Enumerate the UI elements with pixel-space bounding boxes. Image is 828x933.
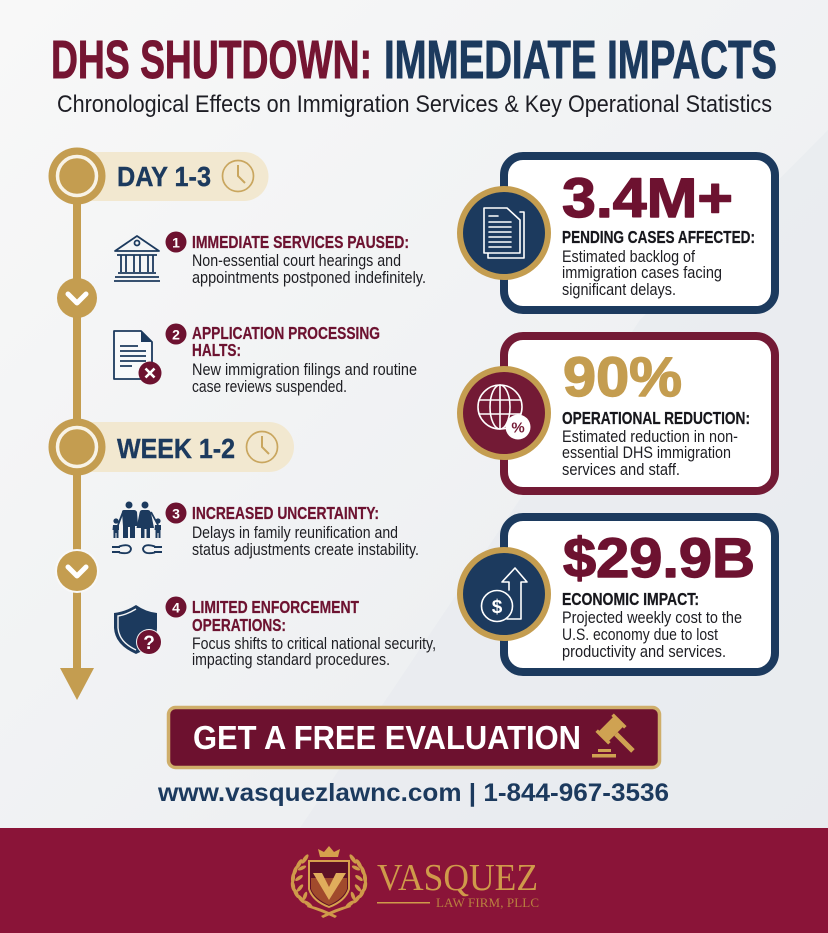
number badge	[166, 324, 186, 344]
stage: day 1-3	[48, 148, 268, 204]
statistic: $29.9B	[563, 526, 755, 589]
item 4	[114, 596, 436, 669]
heading: LIMITED ENFORCEMENT	[192, 597, 359, 617]
logo subtitle: LAW FIRM, PLLC	[436, 895, 539, 910]
description: Estimated reduction in non-	[562, 428, 738, 446]
description: services and staff.	[562, 461, 680, 479]
number badge: 4	[172, 600, 180, 616]
button background	[168, 708, 660, 768]
stage marker	[48, 418, 106, 476]
title: DHS SHUTDOWN:	[51, 30, 372, 90]
stage label: WEEK 1-2	[117, 433, 235, 464]
description: U.S. economy due to lost	[562, 626, 718, 644]
item 1	[114, 232, 426, 287]
item 2	[114, 323, 417, 396]
description: case reviews suspended.	[192, 378, 347, 396]
wreath	[290, 853, 368, 918]
description: Estimated backlog of	[562, 248, 695, 266]
description	[562, 428, 738, 479]
band	[0, 828, 828, 933]
number badge: 3	[172, 506, 180, 522]
description: Delays in family reunification and	[192, 524, 398, 542]
description: immigration cases facing	[562, 264, 722, 282]
timeline line	[73, 176, 81, 672]
number badge: 1	[172, 234, 180, 250]
timeline	[48, 148, 294, 700]
icon: dollar with rising arrow: $	[492, 597, 503, 618]
description	[562, 609, 742, 661]
stat card: operational reduction	[457, 336, 775, 491]
call to action button	[168, 708, 660, 768]
heading: HALTS:	[192, 340, 241, 360]
heading	[192, 323, 380, 360]
number badge	[166, 502, 186, 524]
heading: ECONOMIC IMPACT:	[562, 589, 699, 609]
icon: clock	[246, 432, 278, 462]
statistic: 3.4M+	[562, 166, 733, 229]
description	[192, 524, 419, 559]
heading: PENDING CASES AFFECTED:	[562, 227, 755, 247]
statistic: 90%	[563, 345, 682, 408]
description	[562, 248, 722, 299]
subtitle: Chronological Effects on Immigration Services & Key Operational Statistics	[57, 91, 772, 118]
description: Projected weekly cost to the	[562, 609, 742, 627]
title	[51, 30, 777, 90]
icon: courthouse	[114, 236, 160, 281]
stage marker	[48, 148, 106, 204]
heading: IMMEDIATE SERVICES PAUSED:	[192, 232, 409, 252]
icon: gavel	[592, 713, 642, 760]
description: status adjustments create instability.	[192, 541, 419, 559]
card frame	[504, 156, 775, 310]
description: Non-essential court hearings and	[192, 252, 401, 270]
description: New immigration filings and routine	[192, 361, 417, 379]
logo rule	[377, 902, 430, 904]
icon: dollar with rising arrow	[457, 547, 551, 641]
description	[192, 635, 436, 669]
number badge: 2	[172, 326, 180, 342]
heading: APPLICATION PROCESSING	[192, 323, 380, 343]
stat card: economic impact	[457, 517, 775, 672]
icon: document with x	[114, 331, 162, 384]
description: essential DHS immigration	[562, 444, 731, 462]
description: productivity and services.	[562, 643, 726, 661]
chevron marker	[57, 278, 97, 318]
card frame	[504, 336, 775, 491]
logo emblem	[290, 846, 368, 918]
heading: OPERATIONS:	[192, 615, 286, 635]
card frame	[504, 517, 775, 672]
contact line: www.vasquezlawnc.com | 1-844-967-3536	[157, 779, 669, 807]
icon: globe with percent	[457, 366, 551, 460]
stat card: pending cases	[457, 156, 775, 310]
description: impacting standard procedures.	[192, 651, 390, 669]
footer band	[0, 828, 828, 933]
icon: clock	[222, 160, 254, 192]
crown	[318, 846, 340, 857]
heading	[192, 597, 359, 635]
pill	[77, 422, 294, 472]
description: appointments postponed indefinitely.	[192, 269, 426, 287]
button text: GET A FREE EVALUATION	[193, 719, 581, 756]
heading: INCREASED UNCERTAINTY:	[192, 503, 379, 523]
icon: shield with question mark: ?	[143, 633, 155, 654]
stage: week 1-2	[48, 418, 294, 476]
description: significant delays.	[562, 281, 676, 299]
arrow head	[60, 668, 94, 700]
number badge	[166, 596, 186, 618]
logo wordmark: VASQUEZ	[377, 857, 538, 899]
item 3	[112, 502, 419, 559]
icon: globe with percent: %	[511, 420, 525, 436]
icon: family with broken chain	[112, 502, 162, 553]
description: Focus shifts to critical national security,	[192, 635, 436, 653]
description	[192, 361, 417, 396]
stage label: DAY 1-3	[117, 161, 211, 192]
shield	[309, 861, 349, 907]
number badge	[166, 232, 186, 252]
heading: OPERATIONAL REDUCTION:	[562, 408, 750, 428]
icon: documents	[457, 186, 551, 280]
pill	[77, 152, 268, 201]
description	[192, 252, 426, 287]
icon: shield with question mark	[114, 605, 162, 655]
chevron marker	[55, 549, 99, 593]
